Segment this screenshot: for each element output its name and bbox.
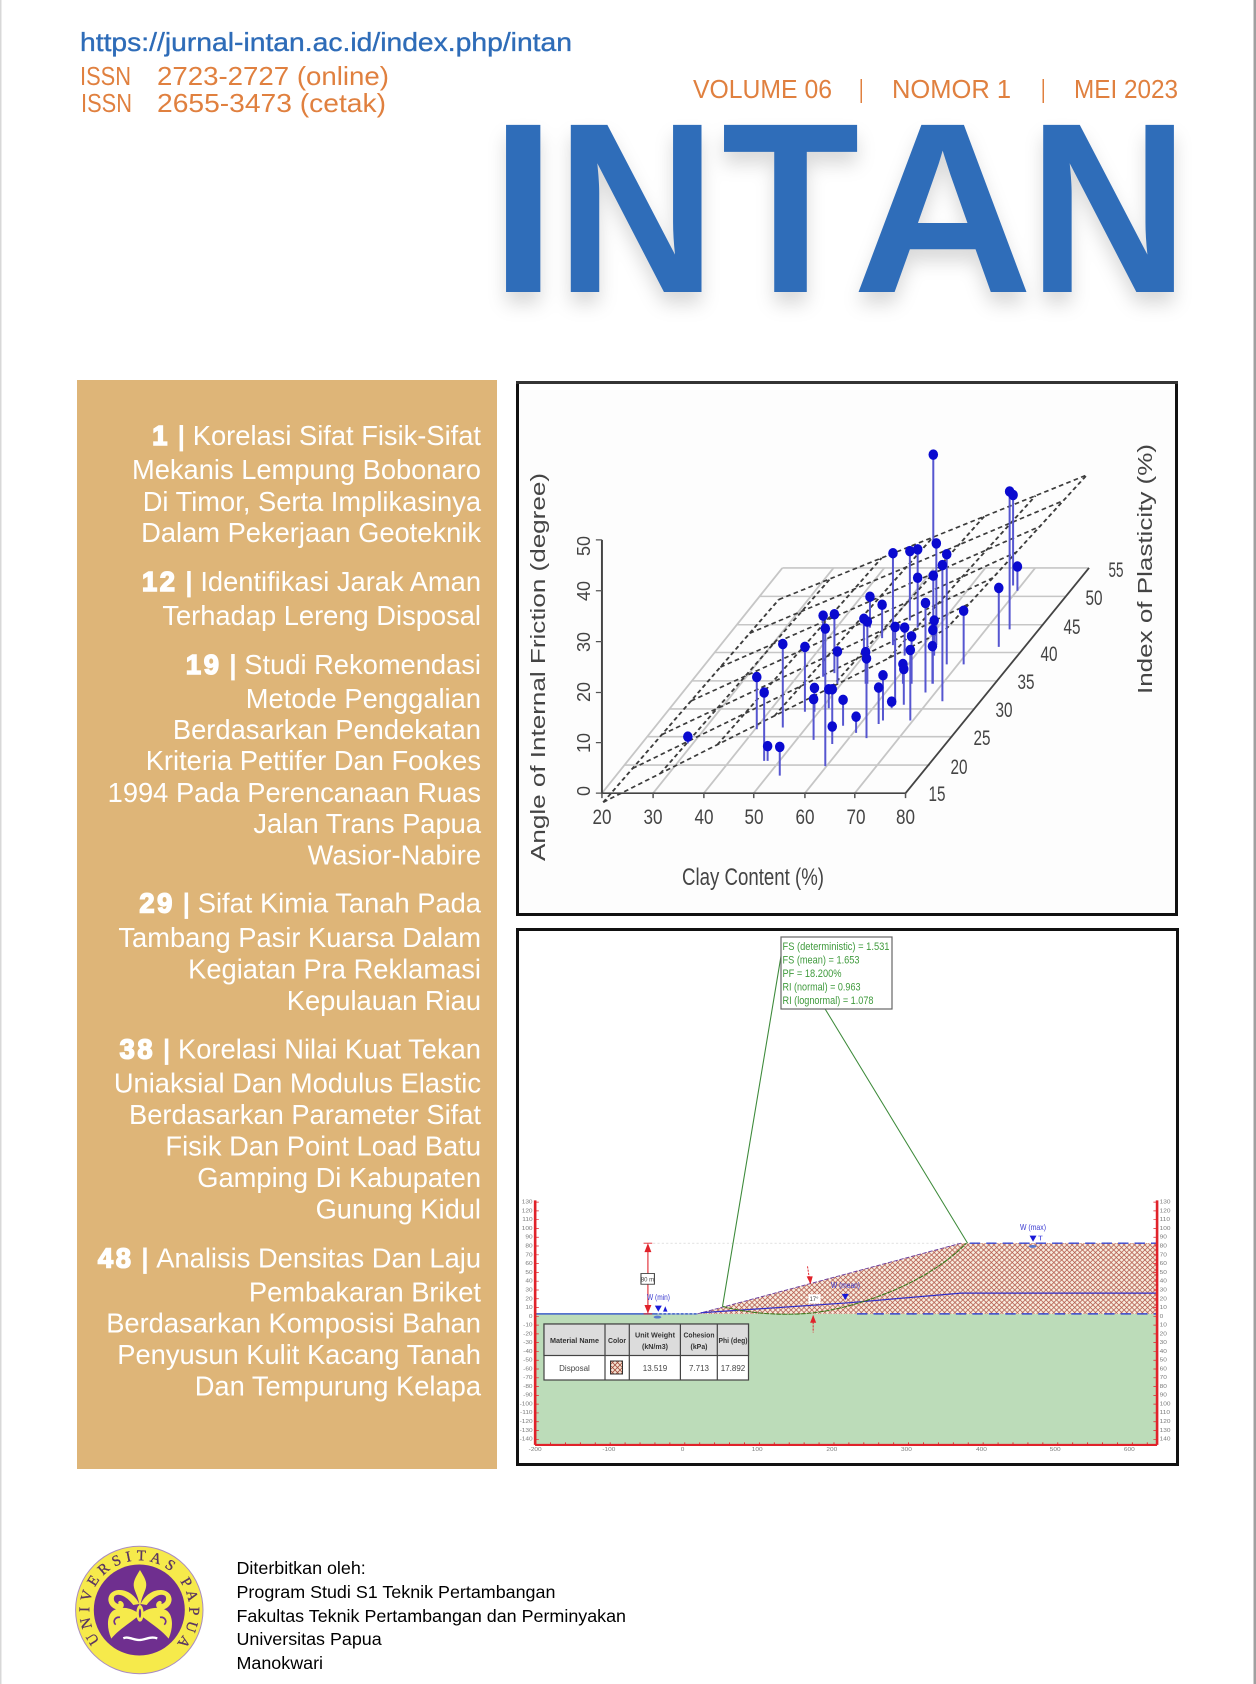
right ruler labels: 0 (1160, 1314, 1164, 1320)
material properties table: Unit Weight (635, 1330, 675, 1340)
right ruler labels: 90 (1160, 1393, 1168, 1399)
left ruler labels: 30 (525, 1288, 533, 1293)
article entry 38: Gamping Di Kabupaten (197, 1162, 481, 1193)
scale rulers (535, 1200, 1157, 1445)
slope cross section (520, 956, 1171, 1453)
material properties table: Disposal (559, 1364, 590, 1373)
right ruler labels: 30 (1160, 1341, 1168, 1346)
article entry 48: Penyusun Kulit Kacang Tanah (117, 1339, 481, 1370)
article entry 19 (108, 649, 482, 870)
title: T (721, 72, 860, 344)
article entry 19: Jalan Trans Papua (253, 808, 482, 839)
left ruler labels: 90 (525, 1235, 533, 1240)
right ruler labels: 10 (1160, 1305, 1168, 1311)
right ruler labels: 70 (1160, 1376, 1168, 1381)
right ruler labels: 110 (1160, 1217, 1171, 1223)
slope angle arrows (807, 1266, 821, 1332)
axis title: clay content: Clay Content (%) (682, 864, 824, 891)
left ruler labels: -50 (523, 1358, 533, 1364)
left ruler labels: -10 (523, 1323, 533, 1328)
left ruler labels: 70 (525, 1253, 533, 1258)
depth axis tick labels: 55 (1108, 559, 1124, 582)
right ruler labels: 80 (1160, 1385, 1168, 1390)
depth axis tick labels: 50 (1086, 587, 1102, 610)
article entry 19: Wasior-Nabire (308, 840, 481, 870)
left ruler labels: -60 (523, 1367, 533, 1372)
height dimension arrow (641, 1243, 654, 1314)
material properties table: (kPa) (690, 1342, 708, 1351)
title (490, 72, 1189, 344)
publisher information: Universitas Papua (236, 1629, 382, 1649)
green callout leader lines (723, 956, 968, 1306)
right ruler labels: 10 (1160, 1323, 1168, 1328)
bottom ruler labels (529, 1447, 1135, 1453)
right ruler labels: 120 (1160, 1420, 1171, 1425)
right ruler labels: 80 (1160, 1244, 1168, 1249)
ISSN block: 2655-3473 (cetak) (157, 88, 386, 118)
right ruler labels: 20 (1160, 1332, 1168, 1337)
article entry 38: Berdasarkan Parameter Sifat (129, 1099, 481, 1130)
right ruler labels: 40 (1160, 1279, 1168, 1284)
depth axis tick labels (928, 559, 1124, 806)
material properties table: 13.519 (643, 1364, 668, 1373)
material properties table: Cohesion (684, 1330, 715, 1340)
publisher information: Fakultas Teknik Pertambangan dan Perminyakan (236, 1606, 626, 1626)
left ruler labels: 20 (525, 1297, 533, 1302)
depth axis tick labels: 45 (1064, 616, 1080, 639)
depth axis tick labels: 30 (996, 699, 1012, 722)
right ruler labels: 20 (1160, 1297, 1168, 1302)
article entry 38: Uniaksial Dan Modulus Elastic (114, 1068, 481, 1098)
article entry 38 (114, 1034, 481, 1224)
water level label: max: W (max) (1020, 1222, 1046, 1232)
article entry 38: 38 | Korelasi Nilai Kuat Tekan (120, 1034, 481, 1064)
axis title: index of plasticity: Index of Plasticity (%) (1135, 444, 1157, 694)
material properties table: (kN/m3) (642, 1342, 668, 1351)
left ruler labels: -90 (523, 1393, 533, 1399)
article entry 48: 48 | Analisis Densitas Dan Laju (98, 1242, 481, 1274)
right ruler labels: 90 (1160, 1235, 1168, 1240)
x axis tick labels (592, 806, 915, 829)
bottom ruler labels: 0 (681, 1447, 685, 1453)
material properties table: 7.713 (689, 1364, 710, 1373)
right ruler labels: 60 (1160, 1261, 1168, 1267)
article entry 48: Pembakaran Briket (249, 1276, 481, 1308)
left ruler labels: -30 (523, 1341, 533, 1346)
article entry 1: 1 | Korelasi Sifat Fisik-Sifat (152, 420, 481, 451)
right ruler labels: 110 (1160, 1411, 1171, 1416)
left ruler labels: 80 (525, 1244, 533, 1249)
water level markers (654, 1236, 1043, 1319)
publisher information: Diterbitkan oleh: (236, 1558, 366, 1578)
left ruler labels: 0 (529, 1314, 533, 1320)
vertical axis tick labels: 0 (574, 786, 594, 796)
left ruler labels: -110 (520, 1411, 533, 1416)
volume, number and date line: NOMOR 1 (892, 74, 1011, 104)
vertical axis tick labels: 10 (574, 733, 594, 753)
right ruler labels: 50 (1160, 1270, 1168, 1276)
left ruler labels: 40 (525, 1279, 533, 1284)
article entry 1 (132, 420, 482, 548)
bottom ruler labels: 400 (976, 1447, 988, 1453)
x axis tick labels: 80 (896, 806, 915, 829)
right ruler labels: 50 (1160, 1358, 1168, 1364)
ISSN block: ISSN (80, 61, 131, 91)
x axis tick labels: 50 (744, 806, 764, 829)
article entry 19: Metode Penggalian (246, 683, 481, 714)
left ruler labels: 10 (525, 1305, 533, 1311)
emblem: yellow fleur (108, 1570, 172, 1640)
seal lettering: UNIVERSITAS PAPUA (79, 1550, 200, 1646)
right ruler labels: 70 (1160, 1253, 1168, 1258)
article entry 29: Kegiatan Pra Reklamasi (188, 954, 481, 984)
panel: slope stability diagram (518, 930, 1178, 1464)
right ruler labels: 120 (1160, 1209, 1171, 1214)
right ruler labels: 30 (1160, 1288, 1168, 1293)
title: I (490, 72, 556, 344)
left ruler labels: 120 (522, 1209, 533, 1214)
x axis tick labels: 60 (796, 806, 814, 829)
left ruler labels: -80 (523, 1385, 533, 1390)
bottom ruler labels: 300 (901, 1447, 913, 1453)
axis title: angle of internal friction: Angle of Internal Friction (degree) (528, 473, 550, 861)
article entry 29 (118, 888, 482, 1016)
right ruler labels: 40 (1160, 1349, 1168, 1355)
bottom ruler labels: 200 (826, 1447, 838, 1453)
article entry 1: Mekanis Lempung Bobonaro (132, 454, 481, 485)
material properties table (544, 1324, 748, 1380)
bottom ruler labels: 600 (1124, 1447, 1135, 1453)
left ruler labels: 130 (522, 1200, 533, 1205)
publisher information: Program Studi S1 Teknik Pertambangan (236, 1582, 555, 1602)
vertical axis tick labels: 20 (574, 682, 594, 702)
vertical axis tick labels: 30 (574, 632, 594, 652)
article entry 29: Kepulauan Riau (287, 985, 481, 1016)
article entry 29: 29 | Sifat Kimia Tanah Pada (139, 888, 482, 918)
bottom ruler labels: -200 (529, 1447, 542, 1453)
right ruler labels: 60 (1160, 1367, 1168, 1372)
article entry 1: Dalam Pekerjaan Geoteknik (141, 517, 481, 548)
callout: safety factor box: FS (mean) = 1.653 (782, 954, 860, 966)
material properties table: Phi (deg) (718, 1336, 748, 1345)
left ruler labels: -120 (520, 1420, 533, 1425)
callout: safety factor box: FS (deterministic) = 1.531 (782, 941, 890, 953)
vertical axis tick labels (574, 536, 594, 796)
right ruler labels: 100 (1160, 1226, 1171, 1232)
water level label: min: W (min) (647, 1292, 670, 1302)
panel: 3D scatter chart (516, 381, 1178, 914)
left ruler labels: 60 (525, 1261, 533, 1267)
right ruler labels: 130 (1160, 1200, 1171, 1205)
panel: table of contents (77, 380, 497, 1469)
height label: 80 m (641, 1278, 654, 1284)
right ruler labels (1160, 1200, 1171, 1442)
article entry 12: 12 | Identifikasi Jarak Aman (142, 566, 481, 597)
slope angle label: 17° (809, 1297, 819, 1303)
callout: safety factor box (781, 937, 892, 1009)
bottom ruler labels: 100 (752, 1447, 763, 1453)
x axis tick labels: 40 (694, 806, 714, 829)
water level label: mean: W (mean) (831, 1281, 860, 1290)
right ruler labels: 100 (1160, 1402, 1171, 1407)
article entry 48: Dan Tempurung Kelapa (195, 1370, 482, 1402)
vertical axis tick labels: 50 (574, 536, 594, 556)
article entry 48 (98, 1242, 482, 1402)
x axis tick labels: 30 (644, 806, 662, 829)
left ruler labels: -20 (523, 1332, 533, 1337)
left ruler labels: -130 (520, 1428, 533, 1434)
article entry 19: Berdasarkan Pendekatan (173, 714, 481, 745)
ISSN block: 2723-2727 (online) (157, 61, 389, 91)
ISSN block: ISSN (81, 88, 132, 118)
article entry 38: Gunung Kidul (316, 1194, 481, 1224)
title: N (556, 73, 716, 344)
title: N (1028, 73, 1189, 344)
article entry 1: Di Timor, Serta Implikasinya (143, 486, 482, 517)
ISSN block (80, 61, 389, 118)
article entry 19: 19 | Studi Rekomendasi (186, 649, 481, 680)
bottom ruler labels: -100 (602, 1447, 616, 1453)
left ruler labels: 50 (525, 1270, 533, 1276)
x axis tick labels: 70 (846, 806, 866, 829)
depth axis tick labels: 25 (974, 727, 990, 750)
callout: safety factor box: RI (normal) = 0.963 (782, 982, 860, 994)
article entry 12 (142, 566, 481, 631)
title: A (852, 73, 1033, 344)
x axis tick labels: 20 (592, 806, 612, 829)
left ruler labels (520, 1200, 533, 1442)
chart: scatter plot (596, 449, 1089, 802)
volume, number and date line: VOLUME 06 (693, 74, 832, 104)
left ruler labels: -70 (523, 1376, 533, 1381)
article entry 38: Fisik Dan Point Load Batu (165, 1130, 481, 1162)
publisher information: Manokwari (236, 1653, 323, 1673)
journal URL: https://jurnal-intan.ac.id/index.php/intan (80, 27, 572, 57)
callout: safety factor box: PF = 18.200% (782, 968, 842, 980)
logo: Universitas Papua seal (75, 1546, 204, 1674)
left ruler labels: -100 (520, 1402, 533, 1407)
bottom ruler labels: 500 (1050, 1447, 1061, 1453)
depth axis tick labels: 15 (928, 783, 946, 806)
right ruler labels: 130 (1160, 1428, 1171, 1434)
left ruler labels: -140 (520, 1437, 533, 1442)
article entry 19: 1994 Pada Perencanaan Ruas (108, 777, 481, 808)
depth axis tick labels: 20 (950, 756, 968, 779)
material properties table: Color (608, 1336, 626, 1345)
publisher information (236, 1558, 626, 1673)
vertical axis tick labels: 40 (574, 581, 594, 601)
volume, number and date line: MEI 2023 (1074, 74, 1178, 104)
article entry 19: Kriteria Pettifer Dan Fookes (146, 745, 481, 776)
volume, number and date line (693, 74, 1178, 104)
article entry 29: Tambang Pasir Kuarsa Dalam (118, 922, 481, 953)
right ruler labels: 140 (1160, 1437, 1171, 1442)
left ruler labels: 110 (522, 1217, 533, 1223)
article entry 48: Berdasarkan Komposisi Bahan (106, 1308, 481, 1338)
callout: safety factor box: RI (lognormal) = 1.078 (782, 995, 874, 1007)
article entry 12: Terhadap Lereng Disposal (162, 600, 481, 631)
material properties table: Material Name (550, 1336, 599, 1345)
left ruler labels: -40 (523, 1349, 533, 1355)
material properties table: 17.892 (721, 1364, 746, 1373)
left ruler labels: 100 (522, 1226, 533, 1232)
depth axis tick labels: 35 (1018, 671, 1034, 694)
depth axis tick labels: 40 (1040, 643, 1058, 666)
